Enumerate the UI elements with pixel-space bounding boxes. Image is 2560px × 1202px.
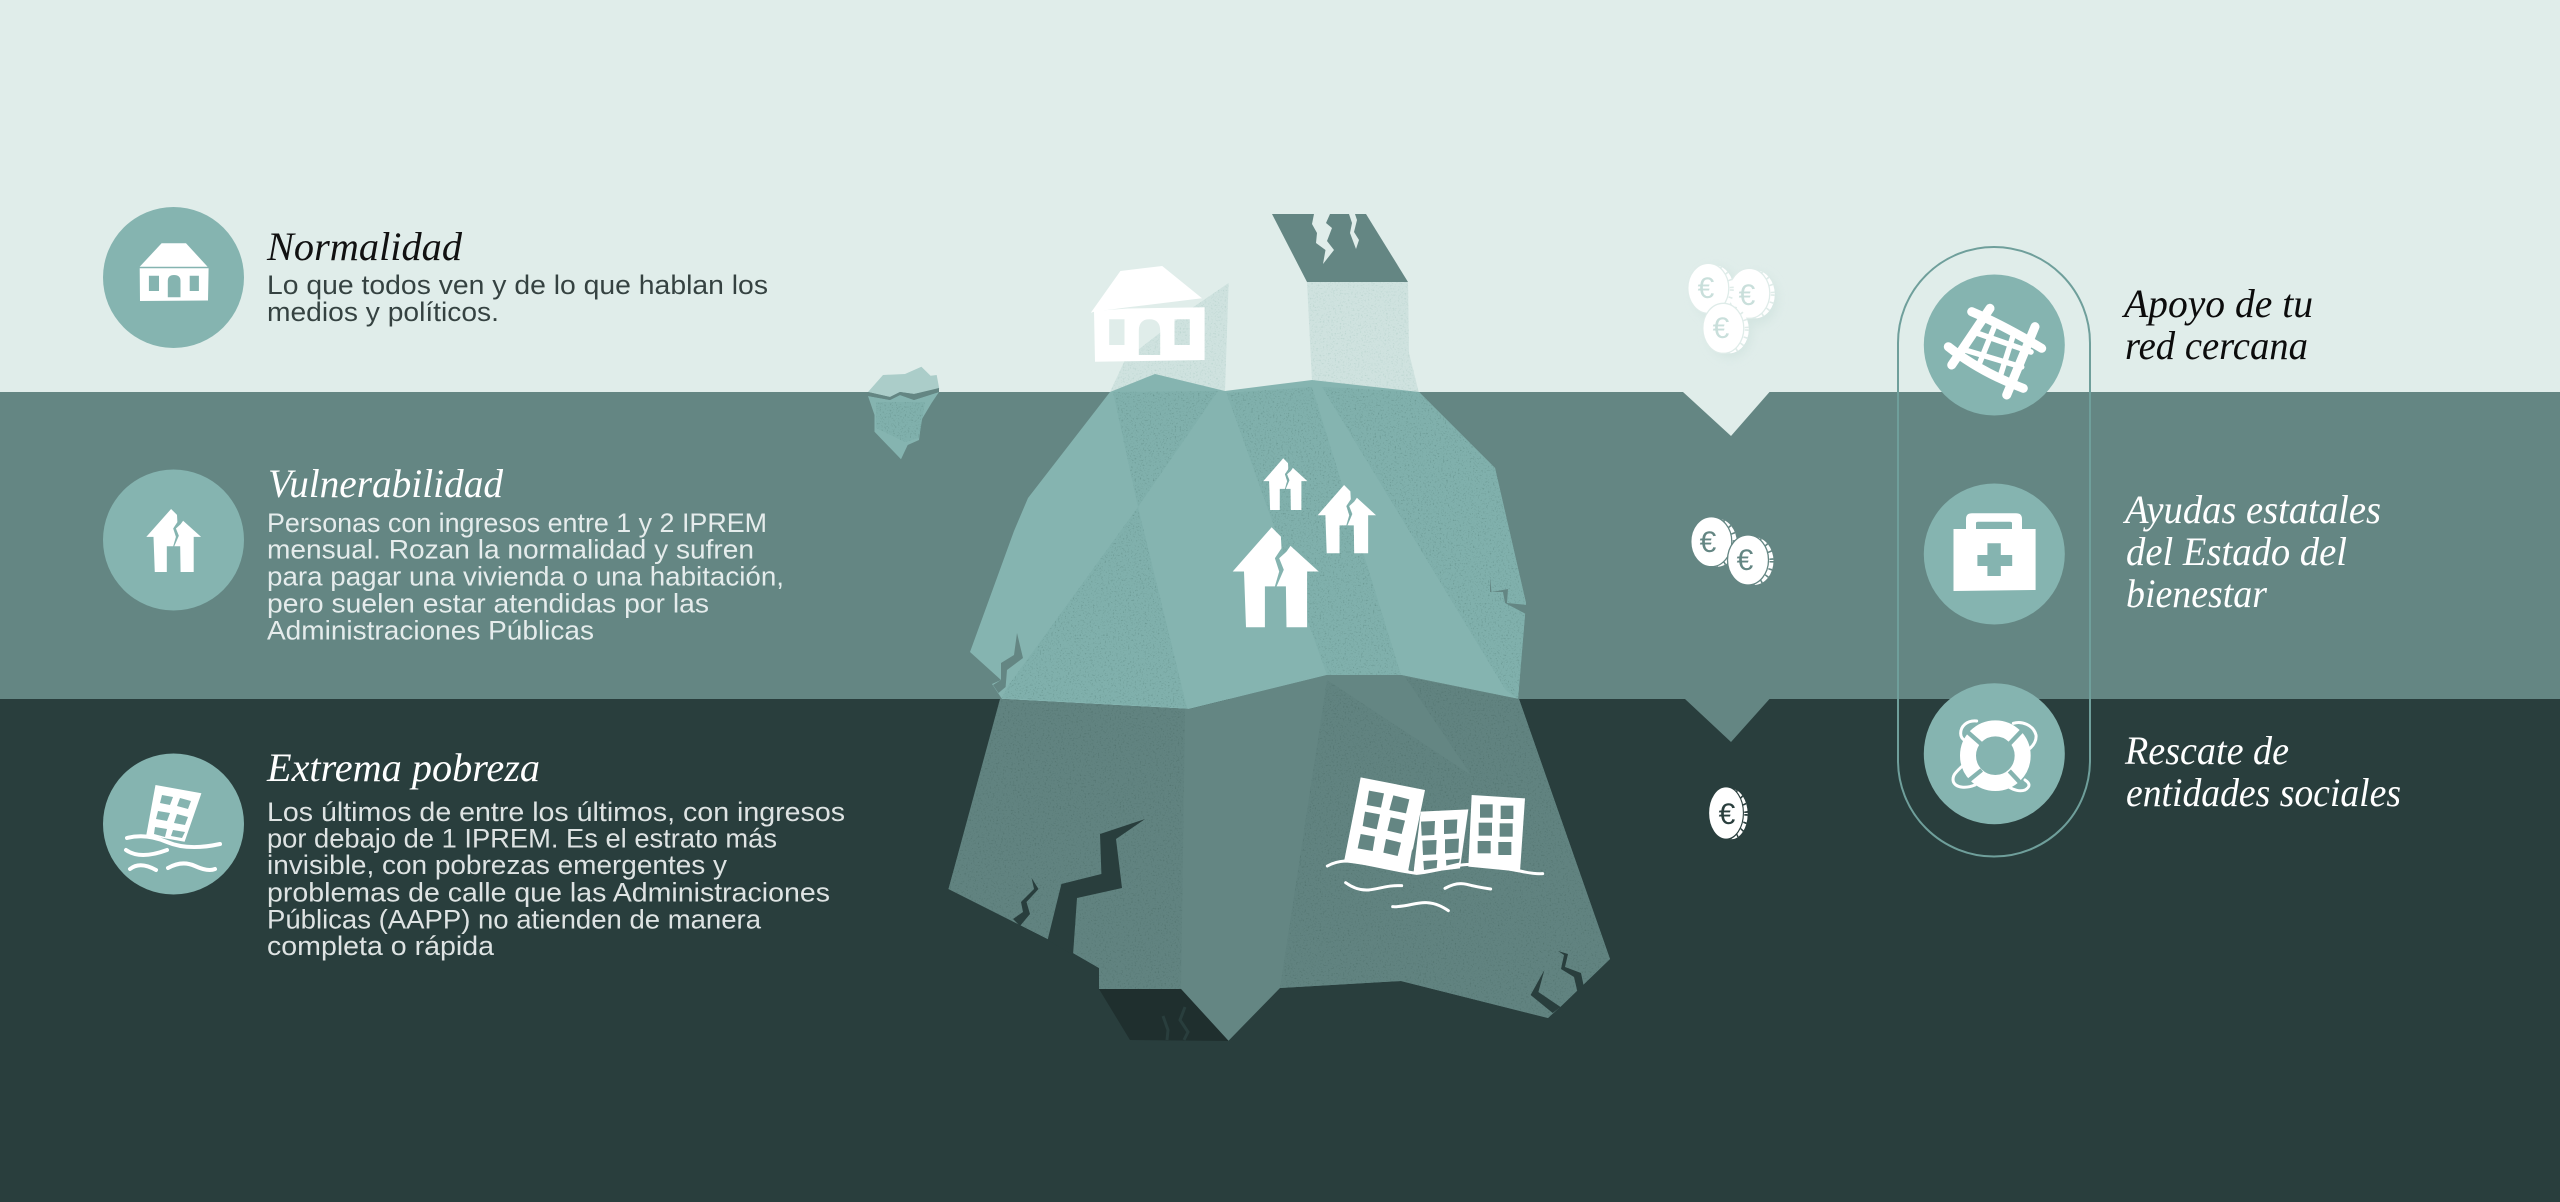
panel: support pill xyxy=(1898,247,2401,856)
icon: two coins xyxy=(1691,517,1774,585)
icon: small ice fragment xyxy=(868,367,939,459)
text: Vulnerabilidad description: Personas con ingresos entre 1 y 2 IPREM xyxy=(267,508,767,538)
arrow: surface to vulnerability xyxy=(1683,392,1770,436)
background band: vulnerability xyxy=(0,392,2560,699)
text: Ayudas estatales del Estado del bienestar: bienestar xyxy=(2126,571,2267,616)
icon: one coin: € xyxy=(1719,798,1736,831)
icon: flooded building in circle xyxy=(103,754,244,894)
panel: Normalidad xyxy=(103,207,768,348)
background band: surface xyxy=(0,0,2560,392)
text: Apoyo de tu red cercana xyxy=(2121,281,2313,368)
text: Normalidad description: medios y políticos. xyxy=(267,297,499,327)
iceberg: lower body xyxy=(948,675,1610,1041)
iceberg: textured facets of middle body xyxy=(1002,387,1526,708)
text: Vulnerabilidad description: Administraciones Públicas xyxy=(267,616,594,646)
heading: Extrema pobreza: Extrema pobreza xyxy=(266,745,540,790)
heading: Vulnerabilidad: Vulnerabilidad xyxy=(268,461,504,506)
crack: middle body left xyxy=(993,633,1023,693)
iceberg: middle body xyxy=(970,374,1526,709)
text: Rescate de entidades sociales xyxy=(2124,728,2401,815)
icon: two coins: € xyxy=(1700,526,1717,559)
markers and coins column xyxy=(1683,263,1778,839)
iceberg: dark underwater tip xyxy=(1099,989,1228,1041)
text: Ayudas estatales del Estado del bienestar xyxy=(2122,487,2381,616)
icon: house in circle xyxy=(103,207,244,348)
icon: cracked house in circle xyxy=(103,470,244,610)
text: Vulnerabilidad description xyxy=(267,508,784,646)
iceberg: cracked chimney top xyxy=(1272,214,1408,282)
text: Extrema pobreza description xyxy=(267,797,845,961)
icon: medium cracked house xyxy=(1318,485,1376,553)
icon: three coins: € xyxy=(1713,312,1730,345)
text: Apoyo de tu red cercana: Apoyo de tu xyxy=(2121,281,2313,326)
text: Normalidad description xyxy=(267,270,768,327)
text: Vulnerabilidad description: para pagar una vivienda o una habitación, xyxy=(267,562,784,592)
icon: lifebuoy in circle xyxy=(1924,683,2065,824)
text: Rescate de entidades sociales: entidades sociales xyxy=(2126,770,2401,815)
iceberg illustration xyxy=(868,214,1610,1041)
text: Extrema pobreza description: completa o rápida xyxy=(267,931,495,961)
text: Apoyo de tu red cercana: red cercana xyxy=(2125,323,2308,368)
text: Ayudas estatales del Estado del bienestar: Ayudas estatales xyxy=(2122,487,2381,532)
text: Normalidad description: Lo que todos ven y de lo que hablan los xyxy=(267,270,768,300)
icon: flooded buildings xyxy=(1327,777,1543,911)
text: Extrema pobreza description: invisible, con pobrezas emergentes y xyxy=(267,850,728,880)
icon: three coins: € xyxy=(1698,272,1715,305)
background band: extreme poverty xyxy=(0,699,2560,1202)
text: Rescate de entidades sociales: Rescate de xyxy=(2124,728,2289,773)
crack: large lower body crack xyxy=(1048,819,1145,955)
crack: lower right cracks xyxy=(1531,951,1584,1013)
iceberg: textured facets of lower body xyxy=(948,677,1610,1018)
icon: three coins: € xyxy=(1739,279,1756,312)
icon: one coin xyxy=(1709,787,1748,839)
icon: three coins xyxy=(1688,263,1778,358)
icon: tilted house on the peak xyxy=(1091,266,1205,362)
text: Ayudas estatales del Estado del bienestar: del Estado del xyxy=(2126,529,2347,574)
arrow: vulnerability to extreme poverty xyxy=(1685,699,1770,742)
icon: small cracked house xyxy=(1263,458,1307,510)
item: Apoyo de tu red cercana xyxy=(1924,274,2313,416)
icon: two coins: € xyxy=(1737,544,1754,577)
icon: safety net in circle xyxy=(1924,274,2065,416)
iceberg: pale peaks above water xyxy=(1110,282,1419,393)
crack: middle body right xyxy=(1490,577,1527,614)
pill outline xyxy=(1898,247,2090,856)
panel: Vulnerabilidad xyxy=(103,461,784,646)
text: Extrema pobreza description: Los últimos de entre los últimos, con ingresos xyxy=(267,797,845,827)
text: Vulnerabilidad description: mensual. Rozan la normalidad y sufren xyxy=(267,534,754,564)
text: Extrema pobreza description: Públicas (AAPP) no atienden de manera xyxy=(267,904,762,934)
icon: large cracked house xyxy=(1233,527,1319,627)
text: Vulnerabilidad description: pero suelen estar atendidas por las xyxy=(267,588,709,618)
crack: small lower left crack xyxy=(1013,878,1038,926)
heading: Normalidad: Normalidad xyxy=(266,224,463,269)
text: Extrema pobreza description: por debajo de 1 IPREM. Es el estrato más xyxy=(267,824,777,854)
panel: Extrema pobreza xyxy=(103,745,845,961)
text: Extrema pobreza description: problemas de calle que las Administraciones xyxy=(267,878,830,908)
item: Ayudas estatales xyxy=(1924,484,2381,624)
item: Rescate de entidades sociales xyxy=(1924,683,2401,824)
icon: first aid kit in circle xyxy=(1924,484,2065,624)
